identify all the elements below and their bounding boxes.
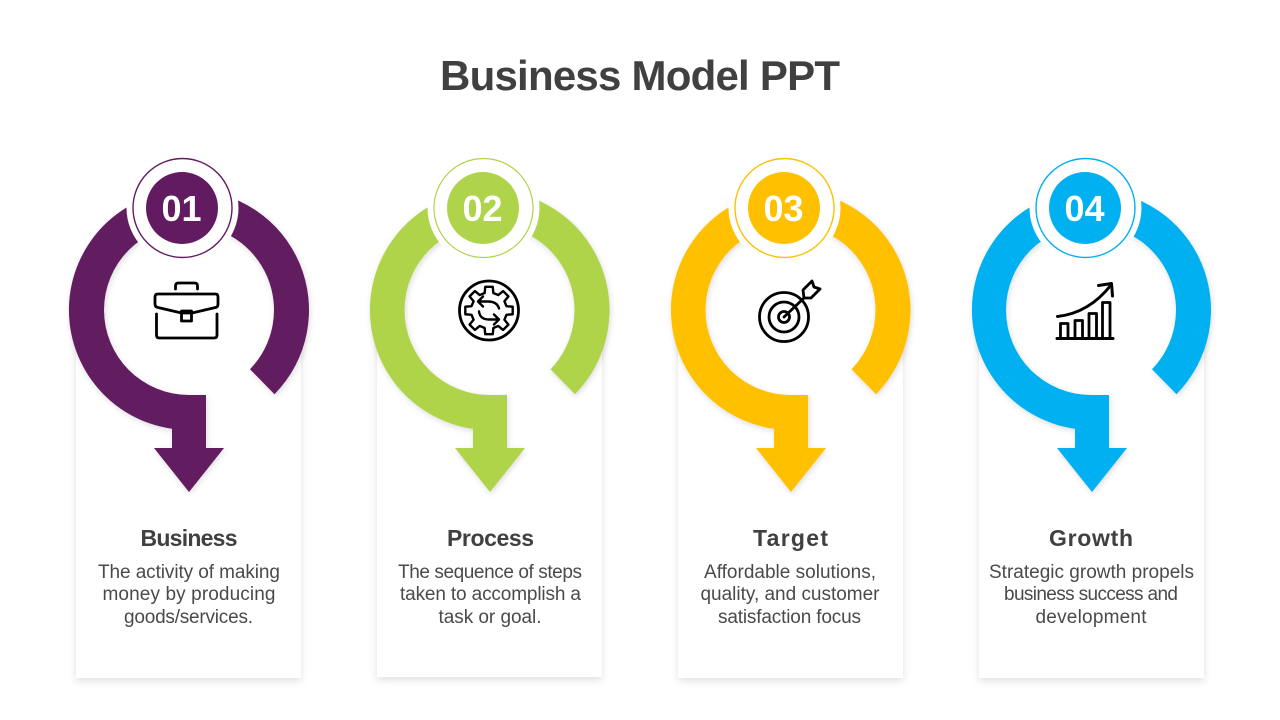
- panel: process: [370, 152, 609, 677]
- description: goods/services.: [124, 607, 253, 628]
- description: The sequence of steps: [398, 562, 582, 583]
- icon: rising bar chart: [1057, 284, 1113, 338]
- panel: business: [69, 152, 309, 678]
- icon: briefcase: [155, 283, 218, 338]
- panel: growth: [972, 152, 1211, 678]
- card background: [377, 310, 602, 677]
- heading: Growth: [1049, 525, 1133, 551]
- panel: target: [671, 152, 910, 678]
- description: The activity of making: [98, 562, 280, 583]
- heading: Business: [140, 525, 238, 551]
- ring arrow: [972, 190, 1211, 492]
- description: quality, and customer: [700, 584, 880, 605]
- number badge: [428, 152, 540, 264]
- number badge: 03: [764, 188, 804, 229]
- number badge: 01: [162, 188, 202, 229]
- number badge: [1030, 152, 1142, 264]
- title: Business Model PPT: [440, 52, 840, 99]
- description: money by producing: [102, 584, 276, 605]
- number badge: [126, 152, 238, 264]
- description: [98, 562, 280, 628]
- icon: gear with cycle arrows: [460, 281, 518, 340]
- description: development: [1036, 607, 1147, 628]
- number badge: 02: [462, 188, 502, 229]
- icon: target with dart: [760, 281, 820, 342]
- description: Affordable solutions,: [704, 562, 876, 583]
- description: Strategic growth propels: [989, 562, 1194, 583]
- description: business success and: [1004, 584, 1178, 605]
- description: [700, 562, 880, 628]
- ring arrow: [671, 190, 910, 492]
- heading: Target: [753, 525, 828, 551]
- card background: [979, 310, 1204, 678]
- ring arrow: [370, 190, 609, 492]
- description: satisfaction focus: [718, 607, 861, 628]
- heading: Process: [447, 525, 534, 551]
- number badge: [728, 152, 840, 264]
- number badge: 04: [1064, 188, 1104, 229]
- card background: [76, 310, 301, 678]
- card background: [678, 310, 903, 678]
- description: taken to accomplish a: [400, 584, 581, 605]
- ring arrow: [69, 190, 309, 492]
- description: [398, 562, 582, 628]
- description: [989, 562, 1194, 628]
- description: task or goal.: [438, 607, 542, 628]
